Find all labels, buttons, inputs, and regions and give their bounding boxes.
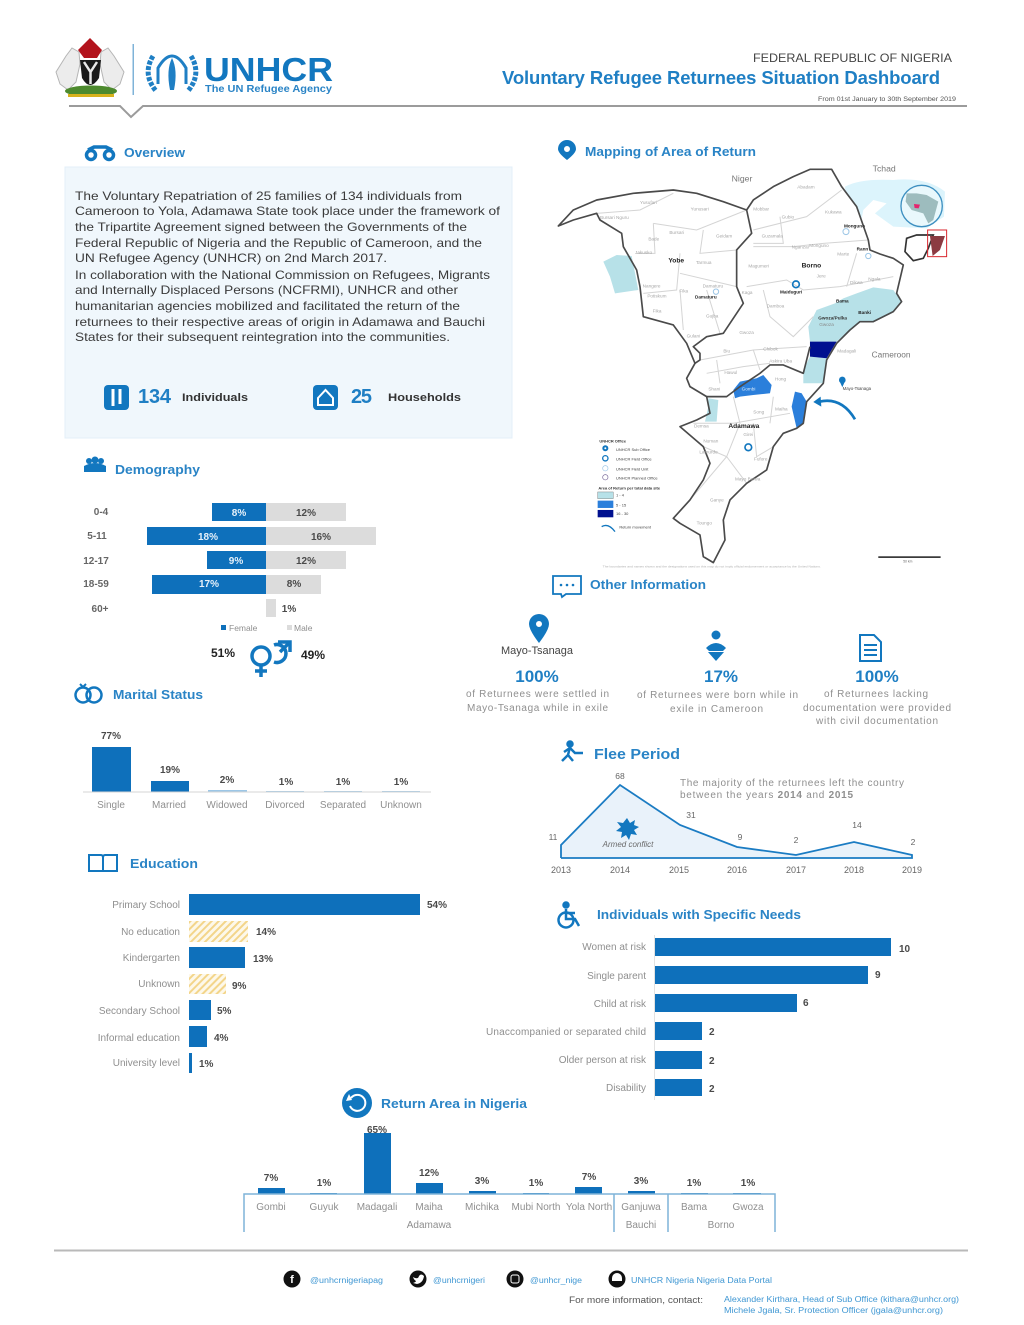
map labels: Tchad <box>873 164 896 174</box>
social: twitter <box>410 1270 485 1288</box>
pin: Mayo-Tsanaga <box>839 377 872 391</box>
population pyramid: 60+ <box>92 604 109 615</box>
bar chart: specific needs <box>486 935 911 1100</box>
stat: documentation: documentation were provided <box>803 703 951 714</box>
bar chart: education: 9% <box>232 981 247 992</box>
contact details: Michele Jgala, Sr. Protection Officer (jgala@unhcr.org) <box>724 1306 943 1315</box>
map labels: Bama <box>836 298 849 303</box>
map legend: Return movement <box>619 524 652 529</box>
heading: other information: Other Information <box>590 577 706 592</box>
bar chart: return areas: Adamawa <box>407 1220 452 1231</box>
data portal link: UNHCR Nigeria Nigeria Data Portal <box>631 1276 772 1285</box>
area chart: flee period: 2017 <box>786 865 806 875</box>
bar chart: specific needs: Women at risk <box>582 942 647 953</box>
bar chart: specific needs: Child at risk <box>594 999 647 1010</box>
map legend: 1 - 4 <box>616 493 625 498</box>
map labels: Cameroon <box>872 350 911 360</box>
stat: Mayo-Tsanaga: Mayo-Tsanaga while in exile <box>467 703 608 714</box>
heading: education: Education <box>130 856 198 871</box>
bar chart: return areas: 12% <box>419 1168 439 1179</box>
map labels: Yusufari <box>640 200 657 205</box>
map labels: Yunusari <box>691 206 709 211</box>
bar chart: return areas: 7% <box>582 1172 596 1183</box>
map labels: Gubio <box>782 215 794 220</box>
map labels: Jakusko <box>635 250 652 255</box>
bar chart: specific needs: 2 <box>709 1056 715 1067</box>
overview text block: States for their subsequent reintegration into the communities. <box>75 330 450 344</box>
inset: world globe <box>901 185 942 227</box>
map legend: UNHCR Field Office <box>616 457 652 462</box>
icon: people group <box>84 456 106 472</box>
heading: marital status: Marital Status <box>113 687 203 702</box>
icon: running person <box>562 742 583 761</box>
map labels: Gulani <box>687 333 700 338</box>
bar chart: return areas: Bama <box>681 1202 707 1213</box>
map labels: Nganzai <box>792 245 809 250</box>
map labels: Madagali <box>837 348 856 353</box>
population pyramid: 17% <box>199 579 219 590</box>
legend: female and male: Male <box>294 623 313 633</box>
icon: baby <box>706 630 726 661</box>
overview text block: and Internally Displaced Persons (NCFRMI), UNHCR and other <box>75 283 458 297</box>
panel: other information <box>466 576 951 727</box>
map <box>558 164 947 568</box>
stat: documentation: with civil documentation <box>815 716 938 727</box>
bar chart: return areas: 3% <box>634 1176 648 1187</box>
state borders <box>558 169 903 563</box>
icon: document <box>860 635 881 661</box>
map labels: Bade <box>648 237 660 242</box>
bar chart: return areas: Michika <box>465 1202 499 1213</box>
footer rule <box>54 1250 968 1252</box>
social: facebook <box>284 1270 383 1288</box>
stat: documentation <box>803 635 951 727</box>
stat: individuals: 134 <box>138 386 172 408</box>
bar chart: specific needs: 10 <box>899 944 911 955</box>
map labels: Gujba <box>706 313 719 318</box>
overview text block: In collaboration with the National Commission on Refugees, Migrants <box>75 268 490 282</box>
bar chart: education <box>98 894 447 1073</box>
bar chart: return areas: 65% <box>367 1125 387 1136</box>
map labels: Song <box>753 409 765 414</box>
population pyramid: 8% <box>232 508 246 519</box>
map labels: Toungo <box>697 521 712 526</box>
bar chart: education: 4% <box>214 1033 229 1044</box>
header rule <box>69 106 967 117</box>
map labels: Damboa <box>767 303 785 308</box>
map legend: UNHCR Field Unit <box>616 467 649 472</box>
stat: born in exile <box>637 630 798 715</box>
bar chart: education: Kindergarten <box>123 953 180 964</box>
area chart: flee period: 2 <box>794 835 799 845</box>
bar chart: return areas: Yola North <box>566 1202 612 1213</box>
map legend: 16 - 30 <box>616 511 629 516</box>
scale bar: 50 km <box>903 560 913 564</box>
header <box>56 38 967 117</box>
map labels: Demsa <box>694 423 709 428</box>
population pyramid: 12% <box>296 508 316 519</box>
map legend: 5 - 15 <box>616 503 627 508</box>
social: instagram <box>506 1270 583 1288</box>
map labels: Biu <box>723 348 730 353</box>
map labels: Monguno <box>844 223 865 228</box>
gender split: 49% <box>301 648 325 662</box>
map labels: Dikwa <box>850 280 863 285</box>
social: facebook: @unhcrnigeriapag <box>310 1276 383 1285</box>
icon: location pin <box>529 614 549 643</box>
bar chart: return areas: Gombi <box>256 1202 286 1213</box>
map labels: Banki <box>858 310 871 315</box>
area chart: flee period: 2013 <box>551 865 571 875</box>
map legend: UNHCR Planned Office <box>616 476 658 481</box>
bar chart: education: 54% <box>427 900 447 911</box>
stat: households: 25 <box>351 386 372 408</box>
map labels: Gwoza/Pulka <box>818 315 847 320</box>
bar chart: marital status: Widowed <box>206 800 248 811</box>
map disclaimer: The boundaries and names shown and the designations used on this map do not imply official endorsement or acceptance by the United Nations. <box>603 564 821 568</box>
bar chart: marital status: Married <box>152 800 186 811</box>
stat: households <box>313 385 461 410</box>
map labels: Damaturu <box>703 283 724 288</box>
map labels: Fika <box>679 288 689 293</box>
map labels: Maiha <box>775 407 788 412</box>
scale bar <box>878 556 941 564</box>
area chart: flee period: 11 <box>549 832 558 842</box>
map labels: Kaga <box>742 290 753 295</box>
population pyramid: 9% <box>229 556 243 567</box>
map legend <box>598 439 661 532</box>
social: instagram: @unhcr_nige <box>530 1276 583 1285</box>
map labels: Abadam <box>797 185 815 190</box>
date range: From 01st January to 30th September 2019 <box>818 96 956 103</box>
stat: born in exile: 17% <box>704 667 738 686</box>
overview text block: humanitarian agencies mobilized and facilitated the return of the <box>75 299 460 313</box>
overview text block: Cameroon to Yola, Adamawa State took place under the framework of <box>75 204 501 218</box>
overview text block: The Voluntary Repatriation of 25 families of 134 individuals from <box>75 189 462 203</box>
bar chart: marital status: 77% <box>101 731 121 742</box>
map labels: Mayo Belwa <box>735 477 761 482</box>
arrow: return movement <box>813 397 855 419</box>
bar chart: marital status: Separated <box>320 800 366 811</box>
bar chart: return areas: Maiha <box>415 1202 443 1213</box>
area chart: flee period: 2018 <box>844 865 864 875</box>
overview text block: Federal Republic of Nigeria and the Republic of Cameroon, and the <box>75 236 482 250</box>
bar chart: return areas: Borno <box>708 1220 735 1231</box>
bar chart: marital status: 1% <box>279 777 293 788</box>
stat: documentation: of Returnees lacking <box>824 689 928 700</box>
map legend: UNHCR Sub Office <box>616 447 651 452</box>
contact label: For more information, contact: <box>569 1295 703 1305</box>
population pyramid: 0-4 <box>94 507 109 518</box>
area chart: flee period: 2 <box>911 837 916 847</box>
heading: return area in Nigeria: Return Area in Nigeria <box>381 1096 528 1111</box>
social: facebook: f <box>290 1274 294 1286</box>
bar chart: return areas: Guyuk <box>310 1202 339 1213</box>
return area: dark shade <box>810 342 837 358</box>
icon: rings <box>76 684 102 702</box>
office markers <box>713 229 871 451</box>
map labels: Guzamala <box>762 233 783 238</box>
annotation: flee period: between the years 2014 and 2015 <box>680 790 853 801</box>
stat: individuals: Individuals <box>182 392 248 404</box>
heading: mapping of area of return: Mapping of Area of Return <box>585 144 756 159</box>
contact details: Alexander Kirthara, Head of Sub Office (kithara@unhcr.org) <box>724 1295 959 1304</box>
area chart: flee period: 2016 <box>727 865 747 875</box>
bar chart: return areas: 3% <box>475 1176 489 1187</box>
map labels: Lamurde <box>699 449 718 454</box>
panel: flee period <box>549 742 922 875</box>
heading: individuals with specific needs: Individuals with Specific Needs <box>597 907 801 922</box>
icon: wheelchair <box>558 902 579 928</box>
map legend: UNHCR Office <box>599 439 627 444</box>
overview text block <box>75 189 501 344</box>
map labels: Niger <box>732 174 752 184</box>
stat: households: Households <box>388 392 461 404</box>
bar chart: education: 1% <box>199 1059 214 1070</box>
icon: binoculars <box>86 147 114 160</box>
map labels: Marte <box>837 251 850 256</box>
overview text block: UN Refugee Agency (UNHCR) on 2nd March 2017. <box>75 251 387 265</box>
map labels: Geidam <box>716 233 732 238</box>
inset: Nigeria locator <box>905 230 947 261</box>
icon: armed conflict burst <box>616 818 639 840</box>
area chart: flee period: 68 <box>615 771 625 781</box>
map labels: Hong <box>775 377 787 382</box>
bar chart: education: Primary School <box>112 900 180 911</box>
icon: Nigeria coat of arms <box>56 38 124 97</box>
panel: overview <box>65 145 512 438</box>
header country: FEDERAL REPUBLIC OF NIGERIA <box>753 51 952 65</box>
map labels: Chibok <box>763 347 778 352</box>
map labels: Fufore <box>754 457 768 462</box>
stat: Mayo-Tsanaga <box>466 614 609 714</box>
stat: documentation: 100% <box>855 667 899 686</box>
bar chart: specific needs: Unaccompanied or separated child <box>486 1027 646 1038</box>
population pyramid: 5-11 <box>87 531 107 542</box>
map labels: Gombi <box>742 387 755 392</box>
bar chart: education: University level <box>113 1058 180 1069</box>
legend: female and male: Female <box>229 623 258 633</box>
map labels: Numan <box>703 439 719 444</box>
map base <box>558 169 903 563</box>
bar chart: education: 14% <box>256 927 276 938</box>
bar chart: marital status: 1% <box>394 777 408 788</box>
population pyramid: 1% <box>282 604 296 615</box>
bar chart: marital status <box>83 731 431 811</box>
bar chart: return areas: 1% <box>741 1178 755 1189</box>
stat: individuals <box>104 385 248 410</box>
map labels: Tarmua <box>696 260 712 265</box>
bar chart: education: Unknown <box>138 979 180 990</box>
map labels: Magumeri <box>748 263 769 268</box>
bar chart: education: Informal education <box>98 1033 180 1044</box>
area chart: flee period: Armed conflict <box>602 840 654 849</box>
area chart: flee period: 31 <box>686 810 696 820</box>
bar chart: education: No education <box>121 927 180 938</box>
heading: flee period: Flee Period <box>594 746 680 763</box>
annotation: flee period <box>680 778 904 801</box>
map labels: Ganye <box>710 497 724 502</box>
population pyramid: 18% <box>198 532 218 543</box>
data portal link <box>608 1270 772 1288</box>
gender split: 51% <box>211 646 235 660</box>
map labels: Ngala <box>868 277 881 282</box>
stat: born in exile: exile in Cameroon <box>670 704 763 715</box>
map labels: Askira Uba <box>769 359 792 364</box>
panel: education <box>89 855 447 1073</box>
map labels: Borno <box>802 262 821 269</box>
return area: light shade <box>603 255 902 422</box>
bar chart: specific needs: 2 <box>709 1084 715 1095</box>
area chart: flee period <box>549 771 922 875</box>
logo wordmark: UNHCR <box>204 51 333 88</box>
bar chart: return areas <box>244 1125 775 1232</box>
overview text block: returnees to their respective areas of origin in Adamawa and Bauchi <box>75 315 485 329</box>
title: Voluntary Refugee Returnees Situation Dashboard <box>502 67 940 88</box>
panel: demography <box>83 456 376 677</box>
map labels: Bursari Nguru <box>600 215 629 220</box>
gender split <box>211 642 325 677</box>
map labels: Fika <box>653 308 662 313</box>
map labels: Monguno <box>809 243 829 248</box>
panel: mapping of area of return <box>558 140 947 568</box>
area chart: flee period: 2014 <box>610 865 630 875</box>
bar chart: specific needs: Older person at risk <box>559 1055 647 1066</box>
bar chart: specific needs: Single parent <box>587 971 646 982</box>
population pyramid <box>83 503 376 617</box>
bar chart: return areas: 1% <box>529 1178 543 1189</box>
stat: Mayo-Tsanaga: Mayo-Tsanaga <box>501 645 574 657</box>
icon: return circle <box>342 1088 372 1118</box>
map labels: Potiskum <box>647 293 667 298</box>
bar chart: marital status: Unknown <box>380 800 422 811</box>
map legend: Area of Return per total data site <box>598 486 661 491</box>
bar chart: return areas: 1% <box>317 1178 331 1189</box>
heading: overview: Overview <box>124 145 186 160</box>
legend: female and male <box>221 623 313 633</box>
divider <box>132 44 134 95</box>
bar chart: return areas: Mubi North <box>512 1202 560 1213</box>
population pyramid: 16% <box>311 532 331 543</box>
bar chart: return areas: Madagali <box>357 1202 397 1213</box>
map labels: Hawul <box>724 370 737 375</box>
heading: demography: Demography <box>115 462 201 477</box>
panel: marital status <box>76 684 431 811</box>
bar chart: education: 5% <box>217 1006 232 1017</box>
map labels: Damaturu <box>695 294 717 299</box>
map labels: Bursari <box>669 230 684 235</box>
pin: Mayo-Tsanaga: Mayo-Tsanaga <box>843 386 872 391</box>
map labels: Girei <box>743 432 753 437</box>
bar chart: marital status: Single <box>97 800 125 811</box>
bar chart: return areas: 1% <box>687 1178 701 1189</box>
icon: female and male symbols <box>252 642 290 677</box>
annotation: flee period: The majority of the returnees left the country <box>680 778 904 789</box>
footer <box>54 1250 968 1315</box>
LGA borders <box>597 190 893 500</box>
map labels <box>600 164 911 526</box>
bar chart: marital status: 19% <box>160 765 180 776</box>
logo tagline: The UN Refugee Agency <box>205 83 332 95</box>
stat: born in exile: of Returnees were born while in <box>637 690 798 701</box>
bar chart: specific needs: 2 <box>709 1027 715 1038</box>
overview background <box>65 167 512 438</box>
population pyramid: 18-59 <box>83 579 109 590</box>
panel: individuals with specific needs <box>486 902 911 1100</box>
area chart: flee period: 2015 <box>669 865 689 875</box>
bar chart: specific needs: 6 <box>803 998 809 1009</box>
area chart: flee period: 14 <box>852 820 862 830</box>
map labels: Nangere <box>643 283 661 288</box>
bar chart: marital status: 1% <box>336 777 350 788</box>
map labels: Yobe <box>668 257 684 264</box>
return area: medium shade <box>733 375 807 428</box>
map labels: Kukawa <box>825 210 842 215</box>
map labels: Shani <box>708 387 720 392</box>
social: twitter: @unhcrnigeri <box>433 1276 485 1285</box>
map labels: Jere <box>817 273 826 278</box>
map labels: Maiduguri <box>780 289 802 294</box>
panel: return area in Nigeria <box>244 1088 775 1232</box>
map labels: Gwoza <box>819 322 834 327</box>
bar chart: marital status: Divorced <box>265 800 305 811</box>
population pyramid: 12% <box>296 556 316 567</box>
area chart: flee period: 2019 <box>902 865 922 875</box>
icon: UNHCR logo wreath <box>148 56 196 91</box>
map labels: Rann <box>857 247 868 252</box>
icon: speech bubble <box>553 576 581 597</box>
bar chart: education: 13% <box>253 954 273 965</box>
bar chart: specific needs: 9 <box>875 970 881 981</box>
contact details <box>724 1295 959 1315</box>
icon: open book <box>89 855 117 871</box>
bar chart: marital status: 2% <box>220 775 234 786</box>
stat: Mayo-Tsanaga: of Returnees were settled in <box>466 689 609 700</box>
bar chart: specific needs: Disability <box>606 1083 646 1094</box>
bar chart: return areas: 7% <box>264 1173 278 1184</box>
icon: map pin <box>558 140 576 160</box>
bar chart: return areas: Gwoza <box>732 1202 764 1213</box>
population pyramid: 8% <box>287 579 301 590</box>
map labels: Gwoza <box>739 330 754 335</box>
lake chad <box>845 179 945 237</box>
overview text block: the Tripartite Agreement signed between the Governments of the <box>75 220 467 234</box>
area chart: flee period: 9 <box>738 832 743 842</box>
map labels: Adamawa <box>728 423 760 430</box>
bar chart: education: Secondary School <box>99 1006 180 1017</box>
map labels: Mobbar <box>753 206 770 211</box>
bar chart: return areas: Ganjuwa <box>621 1202 661 1213</box>
stat: Mayo-Tsanaga: 100% <box>515 667 559 686</box>
population pyramid: 12-17 <box>83 556 109 567</box>
bar chart: return areas: Bauchi <box>626 1220 656 1231</box>
